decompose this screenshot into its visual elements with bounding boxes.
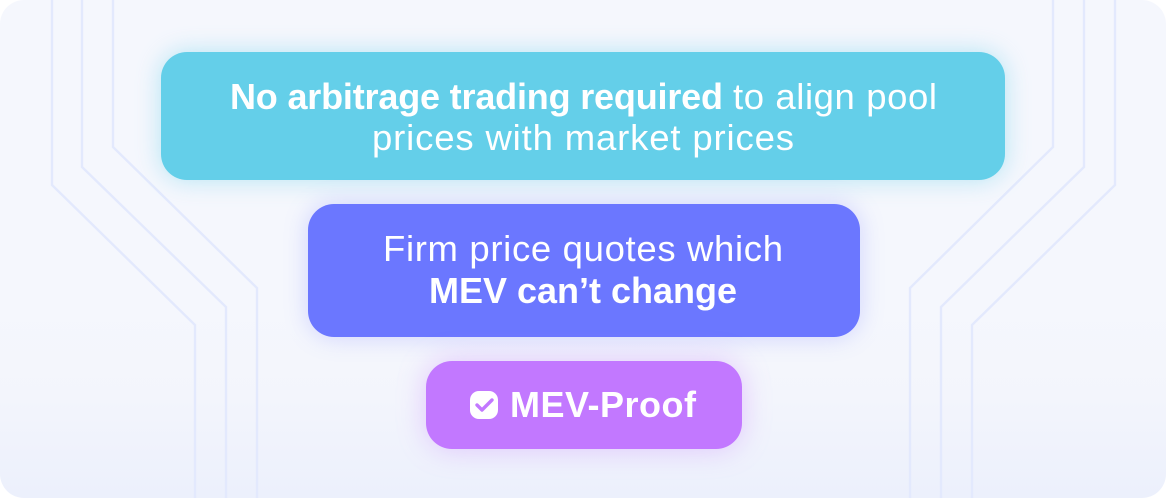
panel text: no arbitrage: No arbitrage trading required (230, 76, 723, 117)
panel: MEV-Proof badge (426, 361, 742, 449)
panel: no arbitrage trading (161, 52, 1005, 180)
panel text: no arbitrage: to align pool (733, 76, 937, 117)
panel text: no arbitrage: prices with market prices (372, 117, 794, 158)
panel text: firm price quotes (383, 228, 783, 311)
icon: check box (470, 391, 498, 419)
panel text: no arbitrage (230, 76, 937, 158)
panel text: firm price quotes: Firm price quotes which (383, 228, 783, 269)
panel text: firm price quotes: MEV can’t change (429, 270, 737, 311)
panel: firm price quotes (308, 204, 860, 337)
badge content: check icon and label (470, 384, 697, 425)
label: MEV-Proof: MEV-Proof (510, 384, 697, 425)
